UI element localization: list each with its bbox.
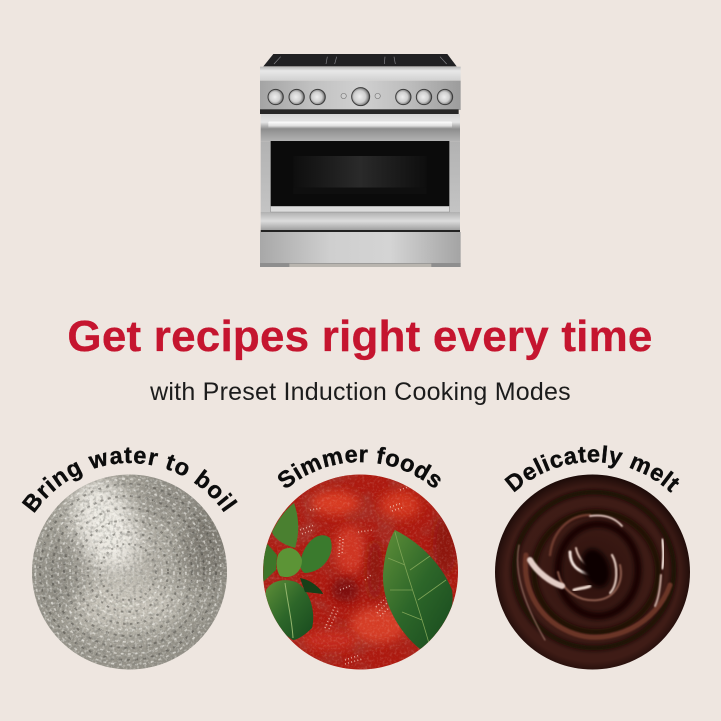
oven door (261, 114, 460, 230)
curved label: Bring water to boil (22, 447, 238, 513)
cooktop (263, 54, 457, 66)
subtitle: with Preset Induction Cooking Modes (149, 378, 571, 406)
control knobs (268, 88, 453, 106)
panel: delicately melt (495, 445, 690, 670)
panel: bring water to boil (22, 447, 238, 670)
basil leaves (263, 503, 453, 649)
bottom drawer (260, 232, 461, 263)
door handle (268, 122, 452, 129)
separator (261, 230, 460, 232)
control panel (260, 67, 461, 114)
image: tomato sauce with basil (260, 472, 462, 674)
curved label: Simmer foods (278, 446, 441, 488)
base and feet (260, 263, 461, 267)
image: melted chocolate swirl (490, 472, 695, 677)
curved label: Delicately melt (504, 445, 680, 493)
panel: simmer foods (263, 446, 458, 670)
oven window (271, 141, 449, 212)
product image: induction range (260, 54, 461, 267)
title: Get recipes right every time (67, 312, 653, 361)
image: boiling water in pot (30, 470, 230, 672)
